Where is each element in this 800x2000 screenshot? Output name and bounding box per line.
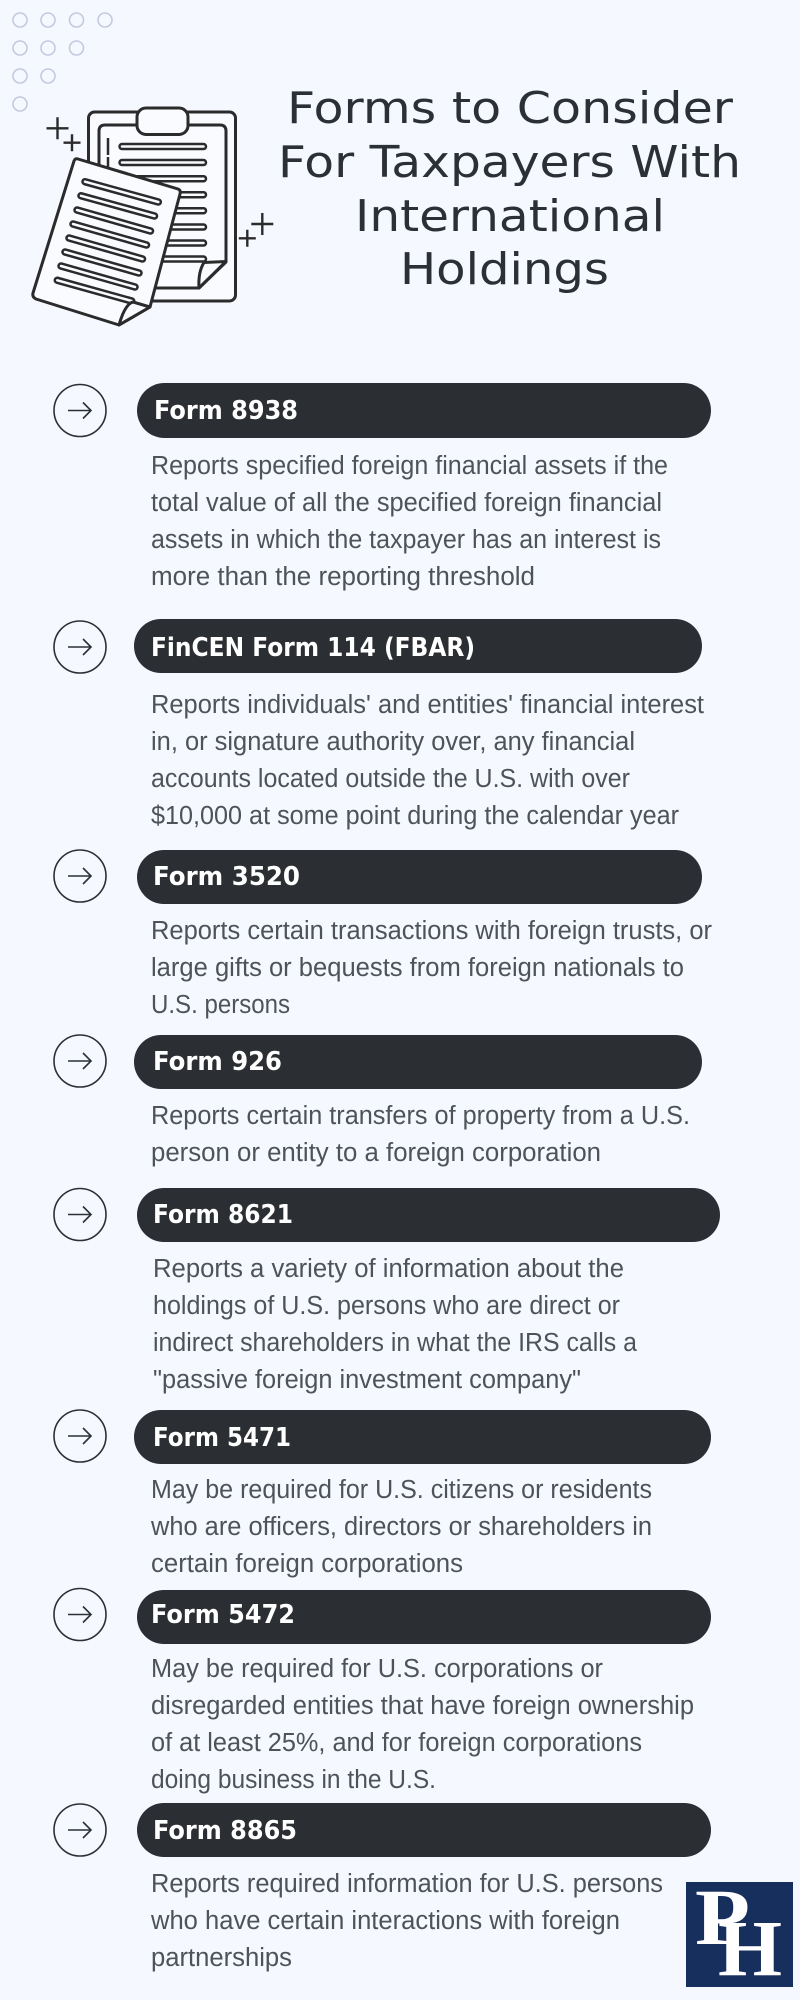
heading pill: Form 926: Form 926 <box>153 1047 282 1077</box>
description: Form 3520: large gifts or bequests from foreign nationals to <box>151 954 684 982</box>
icon: arrow in circle <box>54 1188 106 1240</box>
heading pill: Form 5471 <box>134 1410 711 1464</box>
description: Form 8621: Reports a variety of information about the <box>153 1255 624 1283</box>
icon part: clipboard clip <box>137 108 188 134</box>
logo: PH monogram: P <box>695 1875 750 1962</box>
decorative dot grid <box>13 13 112 111</box>
description: Form 5472: of at least 25%, and for foreign corporations <box>151 1729 642 1757</box>
description: FinCEN Form 114: Reports individuals' and entities' financial interest <box>151 691 704 719</box>
description: Form 5472: doing business in the U.S. <box>151 1766 436 1794</box>
description: Form 5472 <box>151 1655 694 1794</box>
description: Form 8621: "passive foreign investment company" <box>153 1366 581 1394</box>
description: Form 8938: more than the reporting threshold <box>151 563 535 591</box>
section: Form 8865 <box>54 1803 711 1972</box>
heading pill: Form 8938 <box>137 383 711 438</box>
heading pill: FinCEN Form 114 (FBAR): FinCEN Form 114 (FBAR) <box>151 633 475 663</box>
description: Form 8938: total value of all the specified foreign financial <box>151 489 662 517</box>
description: Form 3520: U.S. persons <box>151 991 290 1019</box>
icon part: clipboard board <box>88 112 236 301</box>
description: Form 926: Reports certain transfers of property from a U.S. <box>151 1102 690 1130</box>
heading pill: Form 5471: Form 5471 <box>153 1423 291 1453</box>
icon: arrow in circle <box>54 621 106 673</box>
description: Form 8621 <box>153 1255 638 1394</box>
description: Form 8938: Reports specified foreign financial assets if the <box>151 452 668 480</box>
icon: arrow in circle <box>54 384 106 436</box>
description: Form 8865: partnerships <box>151 1944 292 1972</box>
description: Form 8865: Reports required information for U.S. persons <box>151 1870 663 1898</box>
icon part: front paper fold <box>119 302 150 325</box>
description: Form 5472: May be required for U.S. corporations or <box>151 1655 603 1683</box>
description: Form 3520: Reports certain transactions with foreign trusts, or <box>151 917 712 945</box>
section: Form 8938 <box>54 383 711 591</box>
icon part: plus sparkles <box>46 117 273 247</box>
heading pill: Form 3520 <box>137 850 702 904</box>
heading pill: Form 8865 <box>137 1803 711 1857</box>
icon: arrow in circle <box>54 1035 106 1087</box>
section: Form 5472 <box>54 1588 711 1794</box>
description: Form 926: person or entity to a foreign corporation <box>151 1139 601 1167</box>
description: Form 8865 <box>150 1870 663 1972</box>
icon: arrow in circle <box>54 1804 106 1856</box>
section: FinCEN Form 114 <box>54 619 704 830</box>
heading pill: Form 5472 <box>137 1590 711 1644</box>
icon part: front paper text lines <box>57 182 158 301</box>
description: FinCEN Form 114: accounts located outside the U.S. with over <box>151 765 630 793</box>
section: Form 8621 <box>54 1188 720 1394</box>
heading pill: Form 8621: Form 8621 <box>153 1200 293 1230</box>
title: International <box>355 191 665 242</box>
description: Form 5471 <box>150 1476 652 1578</box>
description: Form 8621: indirect shareholders in what the IRS calls a <box>153 1329 638 1357</box>
icon part: clipboard text lines <box>108 138 204 259</box>
icon: arrow in circle <box>54 850 106 902</box>
heading pill: FinCEN Form 114 (FBAR) <box>134 619 702 673</box>
description: Form 3520 <box>151 917 712 1019</box>
heading pill: Form 8938: Form 8938 <box>154 396 298 426</box>
title <box>278 83 741 295</box>
description: Form 8865: who have certain interactions with foreign <box>150 1907 620 1935</box>
description: Form 5471: certain foreign corporations <box>151 1550 463 1578</box>
icon: arrow in circle <box>54 1588 106 1640</box>
description: Form 5472: disregarded entities that have foreign ownership <box>151 1692 694 1720</box>
description: FinCEN Form 114 <box>151 691 704 830</box>
title: Holdings <box>400 244 609 295</box>
logo: PH monogram: H <box>718 1906 782 1993</box>
icon part: clipboard sheet fold <box>199 262 226 288</box>
icon: arrow in circle <box>54 1410 106 1462</box>
icon part: clipboard sheet <box>99 125 226 288</box>
section: Form 3520 <box>54 850 712 1019</box>
section: Form 5471 <box>54 1410 711 1578</box>
description: Form 8621: holdings of U.S. persons who are direct or <box>153 1292 620 1320</box>
heading pill: Form 5472: Form 5472 <box>151 1600 295 1630</box>
description: Form 926 <box>151 1102 690 1167</box>
heading pill: Form 8621 <box>137 1188 720 1242</box>
description: FinCEN Form 114: $10,000 at some point during the calendar year <box>151 802 679 830</box>
icon part: front paper <box>33 159 180 325</box>
title: For Taxpayers With <box>278 137 741 188</box>
heading pill: Form 926 <box>134 1035 702 1089</box>
title: Forms to Consider <box>287 83 734 134</box>
icon: clipboard and documents <box>33 108 273 325</box>
description: Form 5471: who are officers, directors or shareholders in <box>150 1513 652 1541</box>
heading pill: Form 3520: Form 3520 <box>153 862 300 892</box>
heading pill: Form 8865: Form 8865 <box>153 1816 297 1846</box>
description: Form 8938: assets in which the taxpayer has an interest is <box>151 526 661 554</box>
description: Form 8938 <box>151 452 668 591</box>
section: Form 926 <box>54 1035 702 1167</box>
description: Form 5471: May be required for U.S. citizens or residents <box>151 1476 652 1504</box>
logo: PH monogram <box>686 1875 793 1993</box>
description: FinCEN Form 114: in, or signature authority over, any financial <box>151 728 635 756</box>
